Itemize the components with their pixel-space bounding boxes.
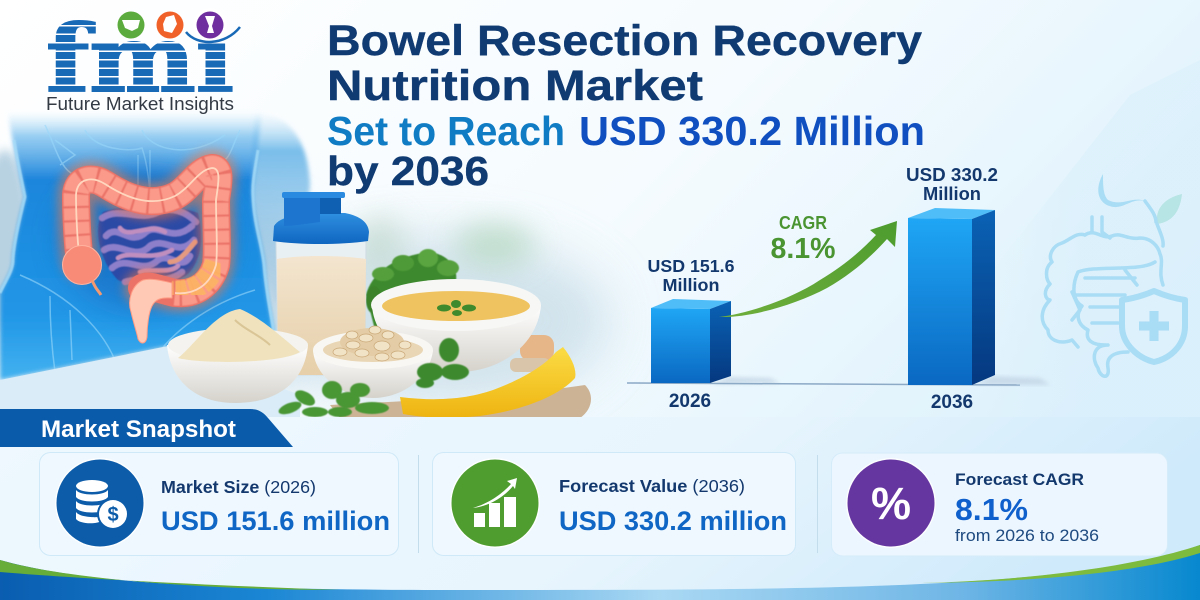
divider [418,455,818,553]
torso fill [0,112,276,380]
CAGR label: 8.1% [770,233,836,265]
shaker liquid [277,256,366,375]
shaker cap [273,213,369,244]
illustration: glowing colon [62,168,218,343]
title: Set to Reach [327,108,565,154]
card value: USD 151.6 million [161,506,390,536]
icon: percent: % [871,478,911,529]
bottom wave [0,545,1200,600]
illustration: oats bowl [313,326,433,398]
illustration: soup bowl [371,279,541,372]
colon centre band [76,168,218,293]
illustration: small intestine [98,206,201,285]
title: USD 330.2 Million [579,108,925,154]
icon: rising bars and arrow [450,458,540,548]
panel: forecast value card [432,452,796,556]
label 2026 value: Million [662,275,720,295]
bar 2026 [651,299,731,383]
icon: percent [846,458,936,548]
misty photo backdrop [0,150,610,410]
logo letters: fmi [46,5,234,113]
illustration: translucent blue torso [0,112,310,380]
title: by 2036 [327,148,489,194]
illustration: protein powder bowl [167,309,308,403]
decorative lower panel [0,417,1200,600]
year labels: 2026 [669,391,711,412]
icon: coins with dollar [55,458,145,548]
title [327,17,925,194]
logo wordmark: Future Market Insights [46,94,234,114]
cecum [62,246,102,284]
illustration: shaker bottle [273,192,369,375]
colon base [76,168,218,293]
CAGR label: CAGR [779,213,827,233]
appendix [92,280,101,295]
CAGR label [770,213,836,265]
panel: market snapshot banner [0,409,293,447]
arm right [253,112,310,305]
torso anatomy lines [20,125,255,372]
illustration: parsley [277,338,469,417]
card label: Forecast Value (2036) [559,476,745,496]
card period: from 2026 to 2036 [955,526,1099,545]
banner heading: Market Snapshot [41,416,236,443]
decorative diagonal light panel [985,60,1200,417]
rectum [130,279,172,343]
illustration: table surface [0,346,300,420]
growth arrow [719,221,897,317]
label 2026 value: USD 151.6 [648,256,735,276]
shaker cup [276,240,366,375]
illustration: greens behind soup bowl [366,249,459,330]
panel: market size card [40,452,398,556]
year labels [669,391,973,413]
illustration: wooden board and peach [330,335,591,418]
card label: Forecast CAGR [955,470,1084,489]
torso rim light [0,140,276,345]
logo [46,5,240,114]
bar chart [627,165,1050,413]
label 2036 value: USD 330.2 [906,165,998,185]
card value: 8.1% [955,492,1028,527]
torso shading [60,170,230,310]
colon glow [76,168,218,293]
card value: USD 330.2 million [559,506,787,536]
illustration: banana [400,347,575,418]
title: Bowel Resection Recovery [327,17,922,65]
label 2026 value [648,256,735,295]
label 2036 value [906,165,998,204]
label 2036 value: Million [923,184,981,204]
icon: intestine with shield and leaf [1042,174,1185,376]
bar shadows [712,376,1050,385]
logo globe circles [117,8,240,42]
chart axis [627,383,1020,385]
shaker spout [284,194,320,226]
bar 2036 [908,208,995,385]
year labels: 2036 [931,392,973,413]
icon: coins with dollar: $ [107,504,119,526]
panel: forecast CAGR card [832,453,1168,556]
card label: Market Size (2026) [161,477,316,497]
colon haustra [76,168,218,293]
title: Nutrition Market [327,62,703,110]
